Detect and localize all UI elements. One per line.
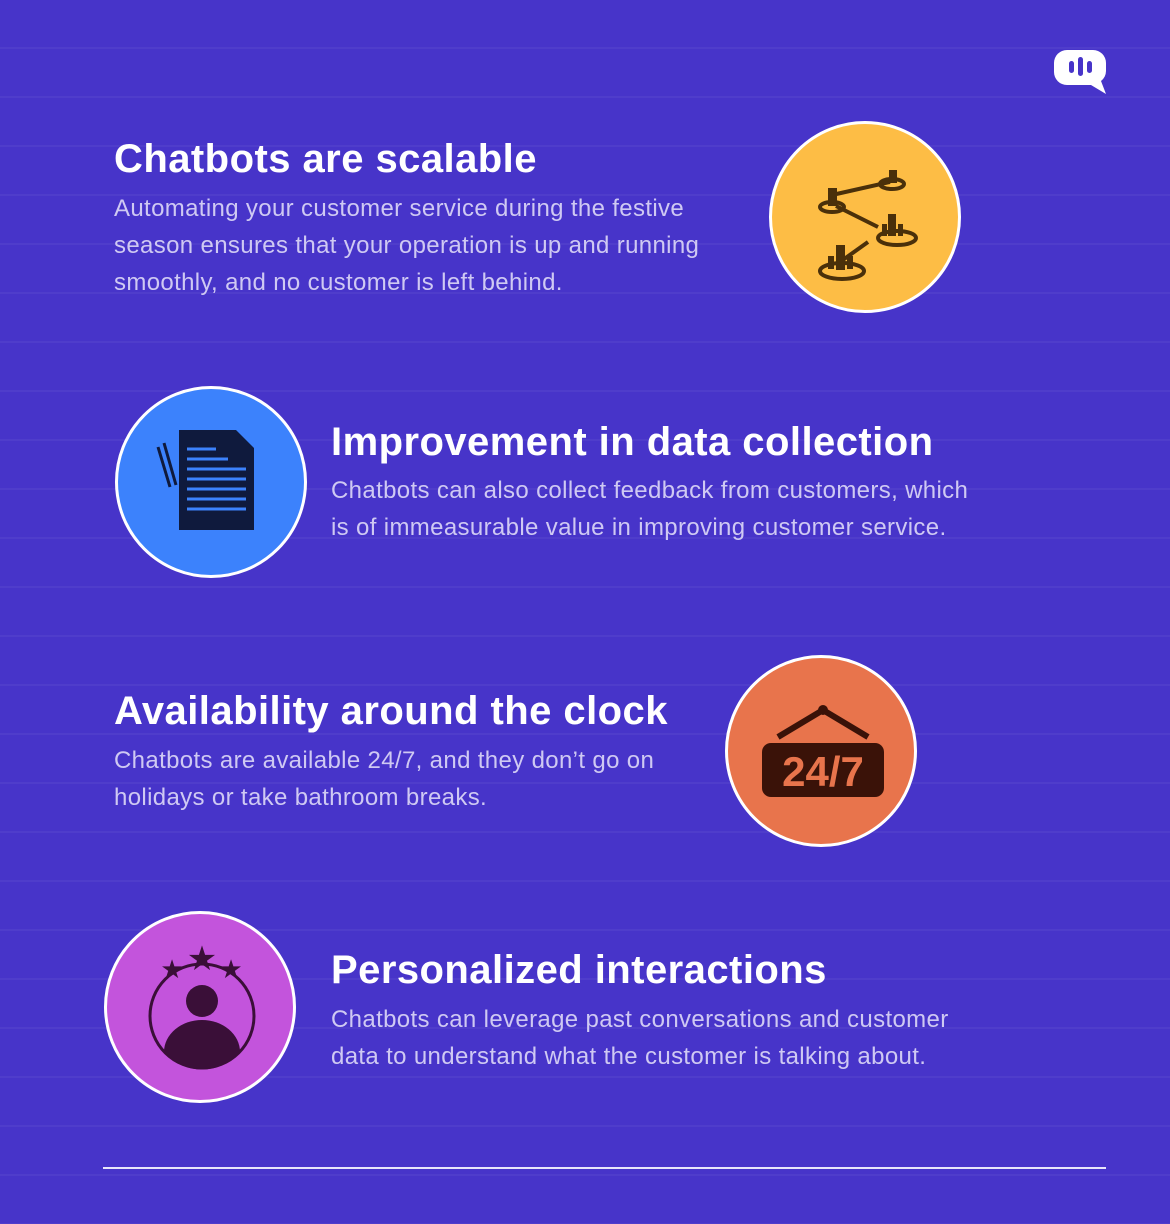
icon: data collection: [115, 386, 307, 578]
heading: personalized: Personalized interactions: [331, 948, 827, 992]
text: scalable: smoothly, and no customer is left behind.: [114, 269, 563, 296]
text: availability: holidays or take bathroom breaks.: [114, 784, 487, 811]
text: scalable: season ensures that your operation is up and running: [114, 232, 699, 259]
text: scalable: [114, 195, 699, 296]
heading: availability: Availability around the clock: [114, 689, 668, 733]
text: availability: [114, 747, 654, 811]
icon: personalized: ★: [160, 955, 184, 985]
text: scalable: Automating your customer service during the festive: [114, 195, 684, 222]
text: data collection: [331, 477, 968, 541]
heading: data collection: Improvement in data collection: [331, 420, 934, 464]
text: data collection: Chatbots can also collect feedback from customers, which: [331, 477, 968, 504]
text: personalized: [331, 1006, 949, 1070]
text: availability: Chatbots are available 24/7, and they don’t go on: [114, 747, 654, 774]
icon: personalized: ★: [187, 939, 217, 979]
icon: scalable: [769, 121, 961, 313]
icon: personalized: [104, 911, 296, 1103]
text: personalized: data to understand what the customer is talking about.: [331, 1043, 926, 1070]
text: personalized: Chatbots can leverage past conversations and customer: [331, 1006, 949, 1033]
text: data collection: is of immeasurable value in improving customer service.: [331, 514, 946, 541]
icon: 24/7: [725, 655, 917, 847]
logo: chat bubble: [1054, 50, 1106, 94]
heading: Chatbots are scalable: Chatbots are scalable: [114, 137, 537, 181]
icon: personalized: ★: [219, 955, 243, 985]
icon: 24/7: 24/7: [782, 748, 864, 795]
